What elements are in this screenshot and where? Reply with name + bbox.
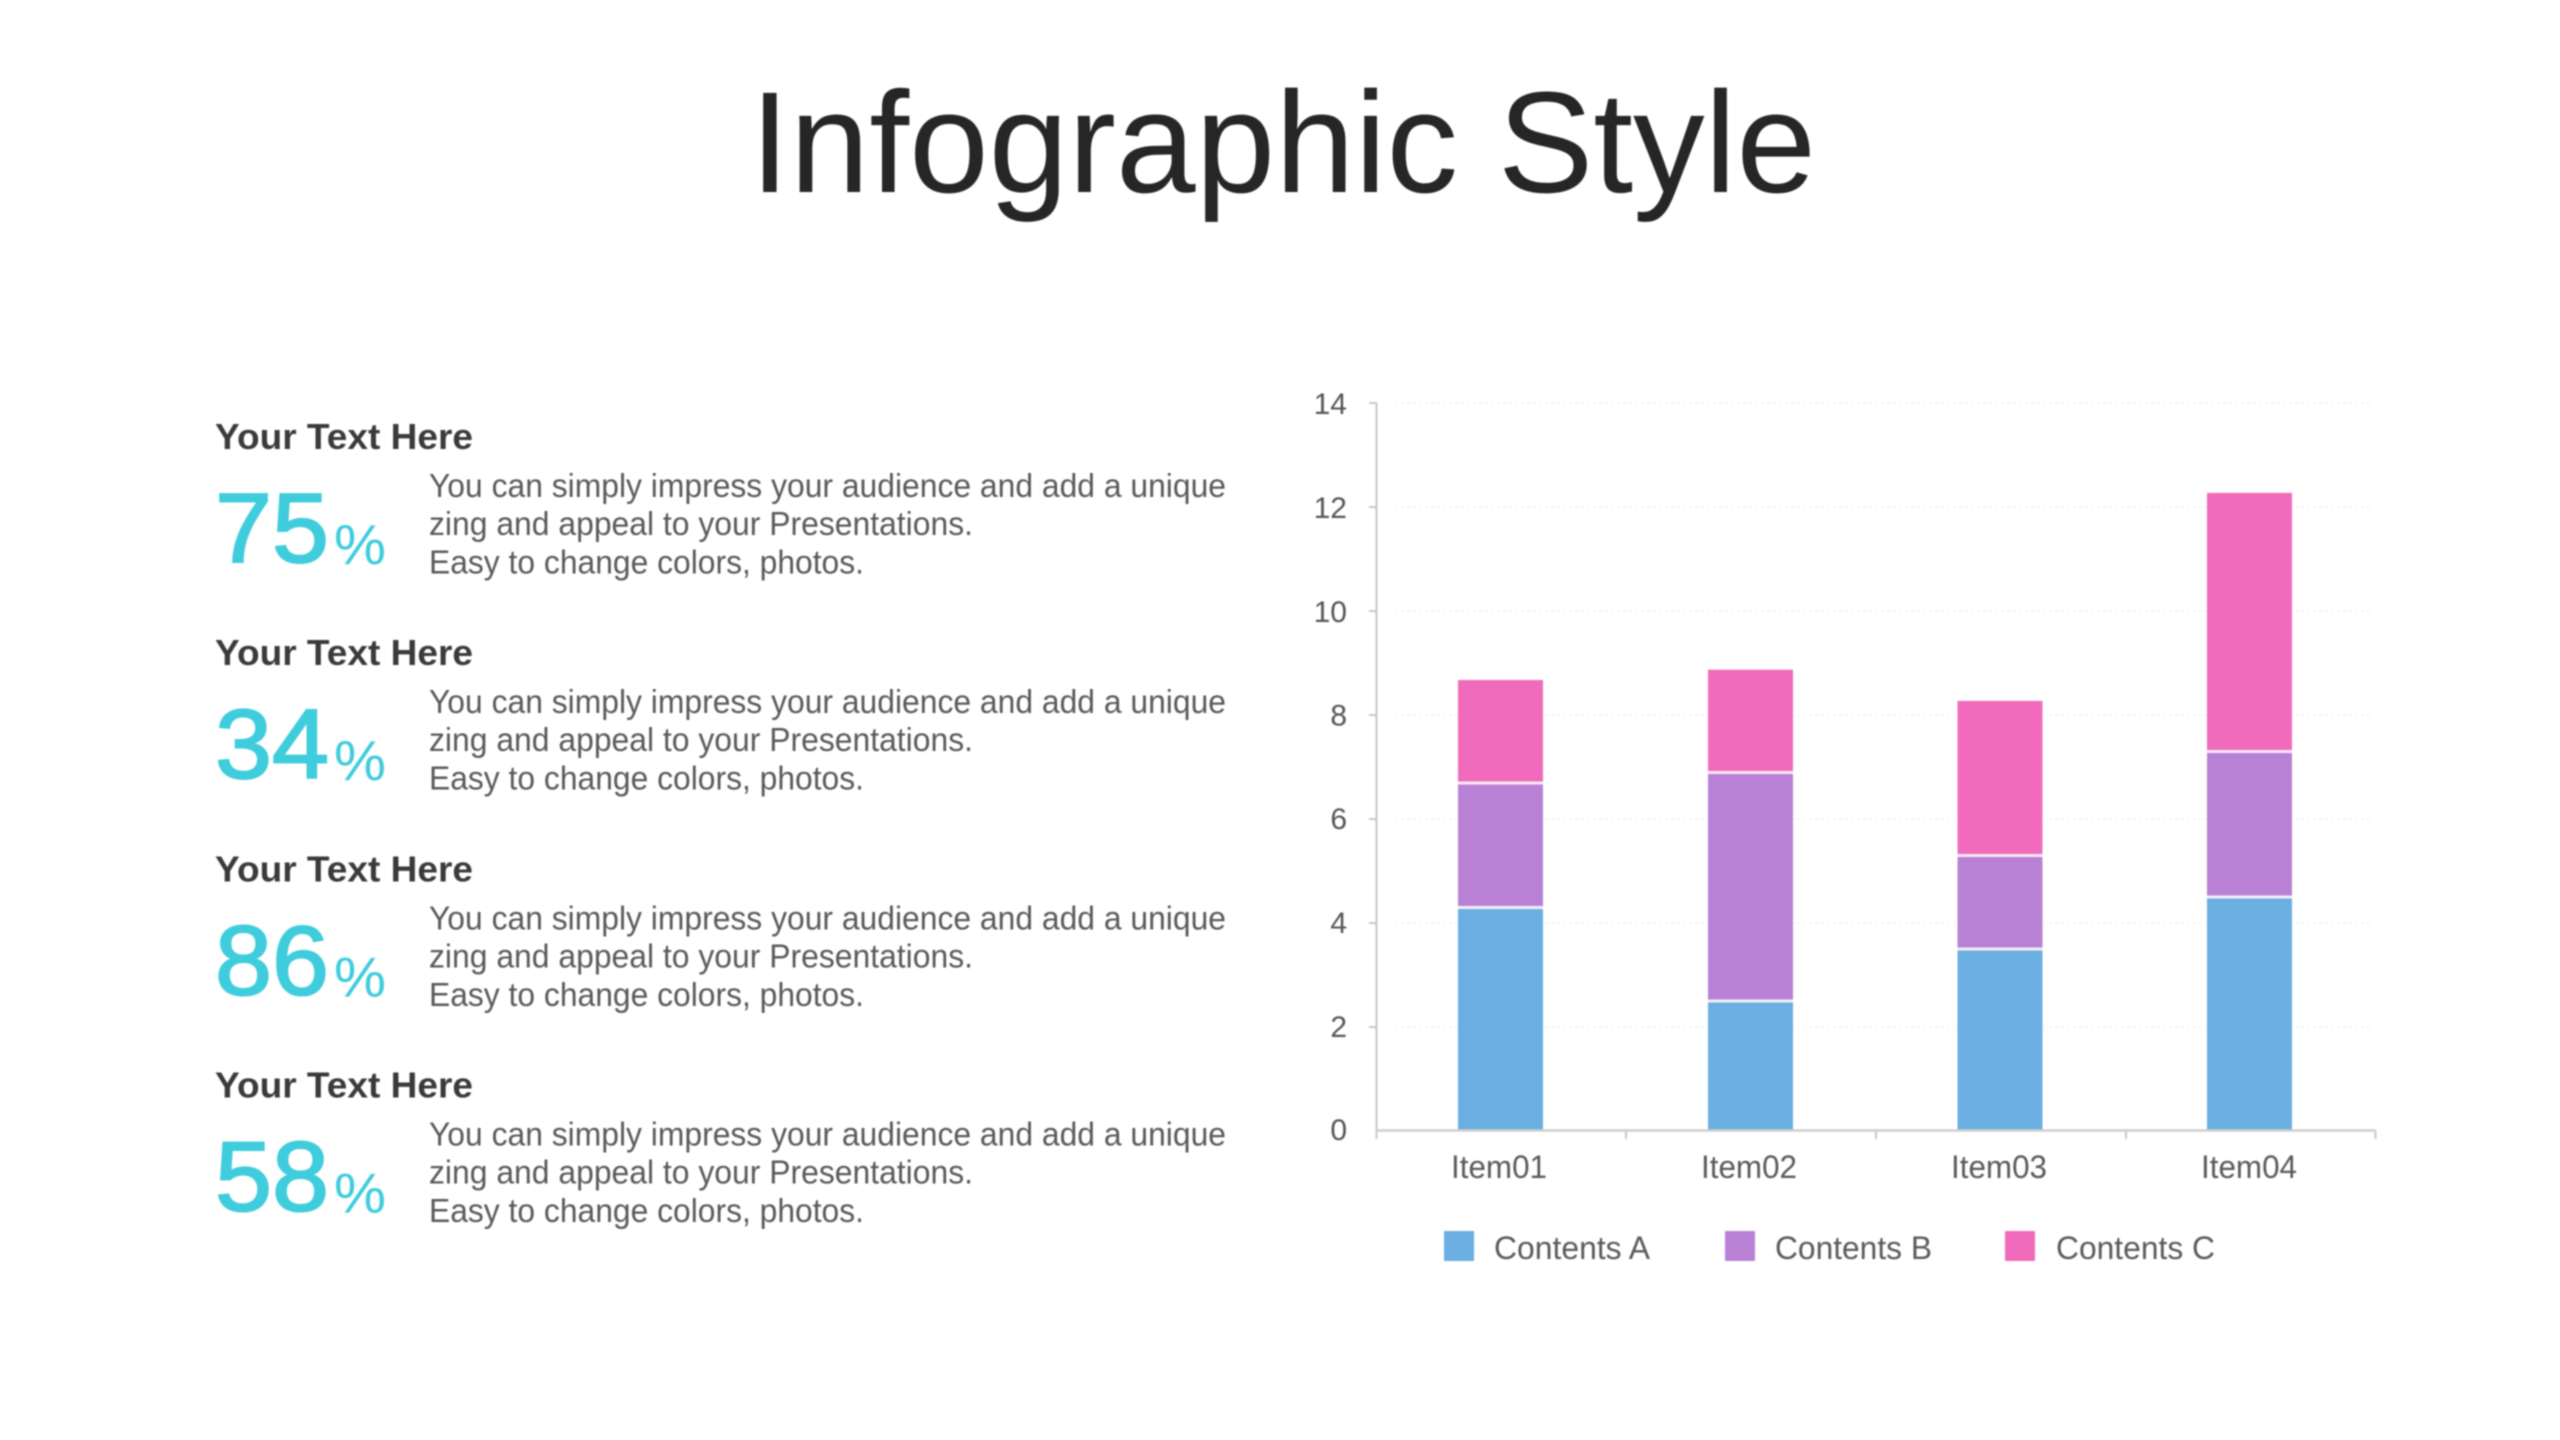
x axis <box>1376 1130 2376 1185</box>
stat row 4: 58%: Easy to change colors, photos. <box>429 1192 864 1229</box>
stat row 4: 58%: 58 <box>215 1122 329 1232</box>
stat row 1: 75%: Easy to change colors, photos. <box>429 544 864 580</box>
stacked bar chart <box>1314 388 2376 1266</box>
legend item: Contents A: Contents A <box>1494 1230 1651 1266</box>
y axis: 2 <box>1330 1011 1347 1044</box>
stat row 1: 75%: You can simply impress your audience and add a unique <box>429 467 1226 504</box>
bar: Item02 <box>1708 670 1793 1130</box>
y axis: 4 <box>1330 907 1347 940</box>
stat row 2: 34%: zing and appeal to your Presentations. <box>429 721 973 758</box>
stat row 1: 75% <box>215 416 1226 583</box>
title: Infographic Style <box>750 62 1816 223</box>
stat row 4: 58% <box>215 1064 1226 1232</box>
x axis: Item02 <box>1701 1149 1797 1185</box>
stat row 3: 86%: You can simply impress your audience and add a unique <box>429 900 1226 936</box>
stat row 1: 75%: 75 <box>215 473 329 583</box>
stat row 2: 34%: Your Text Here <box>215 632 473 673</box>
stat row 4: 58%: You can simply impress your audience and add a unique <box>429 1116 1226 1152</box>
bar: Item04 <box>2207 493 2292 1130</box>
y axis <box>1314 388 1377 1147</box>
stat row 2: 34%: 34 <box>215 689 329 799</box>
stat row 3: 86% <box>215 848 1226 1016</box>
stat row 1: 75%: Your Text Here <box>215 416 473 457</box>
y axis: 0 <box>1330 1114 1347 1147</box>
stat row 2: 34%: Easy to change colors, photos. <box>429 760 864 796</box>
stat row 2: 34% <box>215 632 1226 799</box>
panel: statistics list <box>215 416 1226 1232</box>
y axis: 14 <box>1314 388 1347 421</box>
y axis: 10 <box>1314 596 1347 629</box>
stat row 3: 86%: Easy to change colors, photos. <box>429 976 864 1013</box>
legend item: Contents C: Contents C <box>2056 1230 2215 1266</box>
legend <box>1444 1230 2215 1266</box>
x axis: Item03 <box>1951 1149 2047 1185</box>
x axis: Item01 <box>1451 1149 1547 1185</box>
stat row 2: 34%: You can simply impress your audience and add a unique <box>429 683 1226 720</box>
y axis: 6 <box>1330 803 1347 836</box>
legend item: Contents B: Contents B <box>1775 1230 1932 1266</box>
stat row 3: 86%: Your Text Here <box>215 848 473 890</box>
stat row 3: 86%: % <box>334 946 386 1010</box>
stat row 1: 75%: zing and appeal to your Presentations. <box>429 505 973 542</box>
stat row 1: 75%: % <box>334 513 386 577</box>
stat row 3: 86%: zing and appeal to your Presentations. <box>429 938 973 974</box>
stat row 4: 58%: % <box>334 1162 386 1226</box>
bar: Item01 <box>1458 680 1543 1130</box>
bar: Item03 <box>1958 701 2042 1130</box>
y axis: 8 <box>1330 700 1347 732</box>
stat row 4: 58%: zing and appeal to your Presentations. <box>429 1154 973 1190</box>
x axis: Item04 <box>2201 1149 2297 1185</box>
stat row 3: 86%: 86 <box>215 906 329 1016</box>
stat row 2: 34%: % <box>334 729 386 793</box>
y axis: 12 <box>1314 492 1347 525</box>
stat row 4: 58%: Your Text Here <box>215 1064 473 1106</box>
